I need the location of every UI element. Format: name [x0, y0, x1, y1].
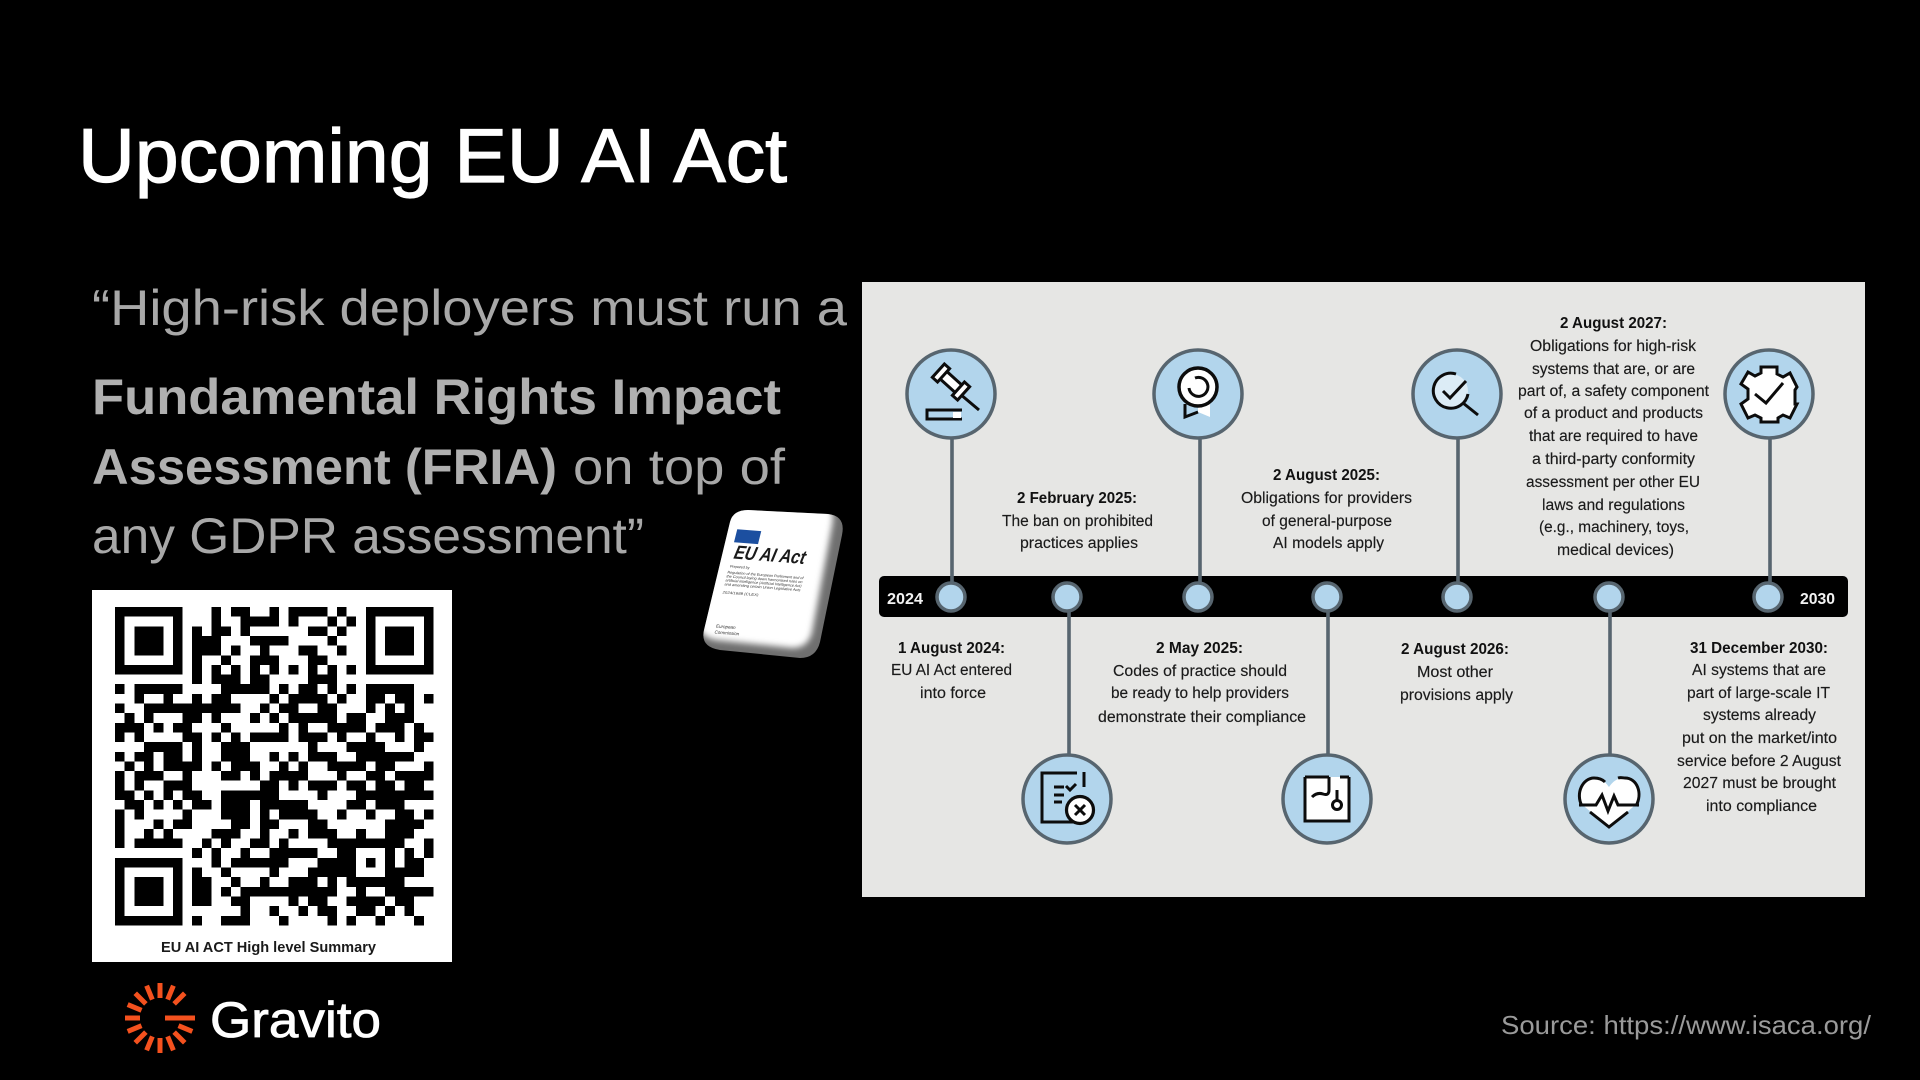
EU flag — [734, 529, 761, 544]
milestone: 2 May 2025: 2 May 2025: — [1156, 640, 1243, 657]
milestone: 31 December 2030: into compliance — [1706, 798, 1817, 815]
source note: Source: https://www.isaca.org/ — [1501, 1010, 1872, 1040]
document small print: and amending certain Union Legislative Acts — [724, 582, 801, 592]
milestone: 2 May 2025: be ready to help providers — [1111, 685, 1289, 702]
quote text block: on top of — [573, 439, 785, 495]
quote text block: “High-risk deployers must run a — [92, 280, 847, 336]
icon: badge — [1154, 350, 1242, 438]
EU AI Act document image — [699, 500, 843, 658]
milestone: 2 August 2027: assessment per other EU — [1526, 474, 1700, 491]
panel: timeline — [862, 282, 1865, 897]
title: Upcoming EU AI Act — [78, 114, 787, 199]
icon: magnifier with check — [1413, 350, 1501, 438]
icon: heart with pulse — [1565, 755, 1653, 843]
document small print: Prepared by — [730, 565, 750, 570]
quote text block: any GDPR assessment” — [92, 508, 644, 564]
milestone: 2 February 2025 — [1002, 490, 1153, 552]
QR caption: EU AI ACT High level Summary — [161, 939, 377, 956]
milestone: 2 February 2025: The ban on prohibited — [1002, 513, 1153, 530]
milestone: 2 February 2025: practices applies — [1020, 535, 1138, 552]
document small print: artificial intelligence (Artificial Intelligence Act) — [725, 578, 802, 588]
timeline bar — [879, 576, 1848, 617]
icon: Gravito sunburst — [125, 983, 195, 1053]
connector stems — [952, 438, 1770, 756]
milestone: 2 August 2027: laws and regulations — [1542, 497, 1685, 514]
milestone: 2 August 2027: Obligations for high-risk — [1530, 338, 1696, 355]
milestone: 2 August 2025 — [1241, 467, 1412, 552]
milestone: 1 August 2024: into force — [920, 685, 986, 702]
document small print: Regulation of the European Parliament and of — [727, 570, 805, 580]
milestone: 31 December 2030: AI systems that are — [1692, 662, 1826, 679]
document title: EU AI Act — [732, 543, 809, 569]
milestone: 2 August 2027: part of, a safety component — [1518, 383, 1710, 400]
year label 2024: 2024 — [887, 591, 923, 608]
milestone: 1 August 2024 — [891, 640, 1012, 702]
milestone: 2 August 2026 — [1400, 641, 1513, 704]
document small print: the Council laying down harmonised rules on — [726, 574, 803, 584]
milestone: 2 August 2025: Obligations for providers — [1241, 490, 1412, 507]
icon: gear with check — [1725, 350, 1813, 438]
milestone: 2 August 2027: that are required to have — [1529, 428, 1698, 445]
milestone: 31 December 2030: put on the market/into — [1682, 730, 1837, 747]
timeline dots — [937, 583, 1782, 611]
milestone: 2 May 2025: demonstrate their compliance — [1098, 709, 1306, 726]
milestone: 2 August 2027: 2 August 2027: — [1560, 315, 1667, 332]
icon: checklist with cross — [1023, 755, 1111, 843]
logo: Gravito — [125, 983, 381, 1053]
milestone: 31 December 2030: 2027 must be brought — [1683, 775, 1837, 792]
QR code modules — [115, 607, 433, 925]
milestone: 2 August 2027: systems that are, or are — [1532, 361, 1695, 378]
wordmark: Gravito — [210, 992, 381, 1048]
milestone: 1 August 2024: EU AI Act entered — [891, 662, 1012, 679]
milestone: 2 August 2027 — [1518, 315, 1710, 559]
milestone: 2 May 2025 — [1098, 640, 1306, 726]
milestone: 2 August 2026: Most other — [1417, 664, 1493, 681]
quote text block: Fundamental Rights Impact — [92, 369, 781, 425]
milestone: 2 August 2027: a third-party conformity — [1532, 451, 1695, 468]
milestone: 2 February 2025: 2 February 2025: — [1017, 490, 1137, 507]
document small print: European — [716, 624, 737, 630]
milestone: 2 August 2026: 2 August 2026: — [1401, 641, 1509, 658]
quote text block: Assessment (FRIA) — [92, 439, 557, 495]
document small print: Commission — [714, 630, 740, 636]
document small print — [712, 564, 806, 640]
milestone: 2 August 2025: AI models apply — [1273, 535, 1384, 552]
milestone: 2 May 2025: Codes of practice should — [1113, 663, 1287, 680]
milestone: 1 August 2024: 1 August 2024: — [898, 640, 1005, 657]
icon: gavel — [907, 350, 995, 438]
milestone: 31 December 2030: systems already — [1703, 707, 1816, 724]
milestone: 2 August 2026: provisions apply — [1400, 687, 1513, 704]
year label 2030: 2030 — [1800, 591, 1835, 608]
milestone: 2 August 2027: of a product and products — [1524, 405, 1703, 422]
milestone: 31 December 2030: service before 2 August — [1677, 753, 1842, 770]
milestone: 2 August 2025: 2 August 2025: — [1273, 467, 1380, 484]
document small print: 2024/1689 (CLEX) — [722, 590, 759, 597]
milestone: 2 August 2027: medical devices) — [1557, 542, 1674, 559]
milestone: 31 December 2030: part of large-scale IT — [1687, 685, 1831, 702]
icon: circuit puzzle — [1283, 755, 1371, 843]
quote text block — [92, 280, 847, 564]
milestone: 2 August 2025: of general-purpose — [1262, 513, 1392, 530]
milestone: 31 December 2030: 31 December 2030: — [1690, 640, 1828, 657]
milestone: 2 August 2027: (e.g., machinery, toys, — [1539, 519, 1689, 536]
QR code card — [92, 590, 452, 962]
milestone: 31 December 2030 — [1677, 640, 1842, 815]
